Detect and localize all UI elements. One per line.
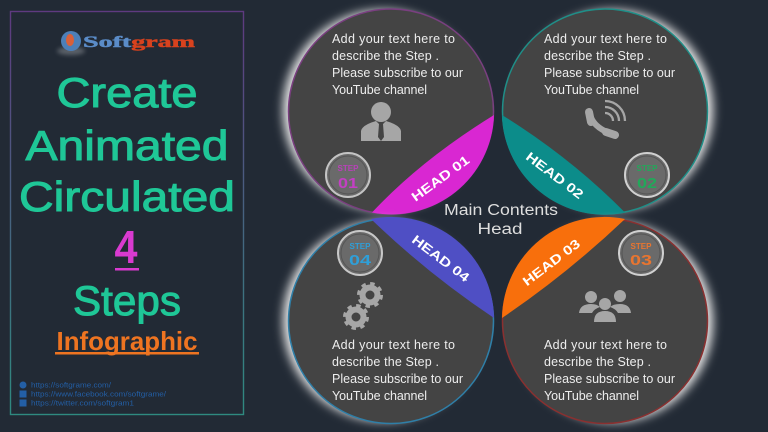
step 1 text: YouTube channel bbox=[332, 83, 427, 97]
logo bbox=[57, 31, 196, 55]
step 4 text: describe the Step . bbox=[332, 355, 439, 369]
badge step 4 bbox=[338, 231, 382, 275]
step 3 text: Please subscribe to our bbox=[544, 372, 675, 386]
step 3 text: Add your text here to bbox=[544, 338, 667, 352]
head 01 segment bbox=[372, 115, 494, 214]
icon: people bbox=[579, 290, 631, 322]
main contents label bbox=[444, 202, 558, 238]
step 3 text: YouTube channel bbox=[544, 389, 639, 403]
head 04 segment bbox=[371, 217, 494, 318]
step 2 text: Please subscribe to our bbox=[544, 66, 675, 80]
step 2 text: Add your text here to bbox=[544, 32, 667, 46]
step 4 text bbox=[332, 338, 463, 403]
badge step 4: STEP bbox=[350, 242, 371, 251]
social links: https://www.facebook.com/softgrame/ bbox=[31, 392, 166, 398]
badge step 3: STEP bbox=[631, 242, 652, 251]
step 1 text: Add your text here to bbox=[332, 32, 455, 46]
badge step 3: 03 bbox=[630, 252, 652, 269]
badge step 2 bbox=[625, 153, 669, 197]
main contents label: Head bbox=[478, 221, 522, 238]
badge step 2: STEP bbox=[637, 164, 658, 173]
badge step 1: STEP bbox=[338, 164, 359, 173]
main contents label: Main Contents bbox=[444, 202, 558, 219]
badge step 1: 01 bbox=[338, 175, 358, 192]
icon: businessman bbox=[361, 102, 401, 141]
social links: https://softgrame.com/ bbox=[31, 382, 111, 390]
head 02 label: HEAD 02 bbox=[523, 149, 586, 202]
step 2 text bbox=[544, 32, 675, 97]
step 4 text: Add your text here to bbox=[332, 338, 455, 352]
step 1 text bbox=[332, 32, 463, 97]
heading lines: Circulated bbox=[19, 173, 235, 220]
panel: title bbox=[10, 12, 244, 414]
head 03 segment bbox=[502, 217, 625, 318]
panel: step 3 bbox=[502, 217, 713, 424]
icon: gears bbox=[344, 284, 382, 328]
heading lines: Steps bbox=[73, 277, 181, 324]
badge step 4: 04 bbox=[349, 252, 372, 269]
step 1 text: Please subscribe to our bbox=[332, 66, 463, 80]
subtitle: Infographic bbox=[56, 326, 198, 356]
step 4 text: YouTube channel bbox=[332, 389, 427, 403]
step 3 text bbox=[544, 338, 675, 403]
head 04 label: HEAD 04 bbox=[409, 232, 473, 285]
panel: step 2 bbox=[502, 9, 713, 215]
heading lines: Animated bbox=[26, 122, 228, 169]
social links bbox=[20, 382, 166, 408]
step 1 text: describe the Step . bbox=[332, 49, 439, 63]
head 03 label: HEAD 03 bbox=[520, 236, 583, 289]
badge step 2: 02 bbox=[637, 175, 657, 192]
step 2 text: YouTube channel bbox=[544, 83, 639, 97]
head 02 segment bbox=[502, 115, 625, 215]
heading lines bbox=[19, 69, 235, 324]
panel: step 1 bbox=[283, 9, 494, 214]
logo: Soft gram bbox=[83, 34, 196, 51]
icon: phone bbox=[589, 101, 625, 135]
social links: https://twitter.com/softgram1 bbox=[31, 400, 134, 408]
panel: step 4 bbox=[283, 217, 494, 424]
panel border bbox=[10, 12, 244, 414]
heading lines: Create bbox=[56, 69, 198, 116]
step 2 text: describe the Step . bbox=[544, 49, 651, 63]
head 01 label: HEAD 01 bbox=[408, 152, 472, 204]
step 4 text: Please subscribe to our bbox=[332, 372, 463, 386]
badge step 3 bbox=[619, 231, 663, 275]
badge step 1 bbox=[326, 153, 370, 197]
number 4: 4 bbox=[114, 221, 138, 273]
step 3 text: describe the Step . bbox=[544, 355, 651, 369]
